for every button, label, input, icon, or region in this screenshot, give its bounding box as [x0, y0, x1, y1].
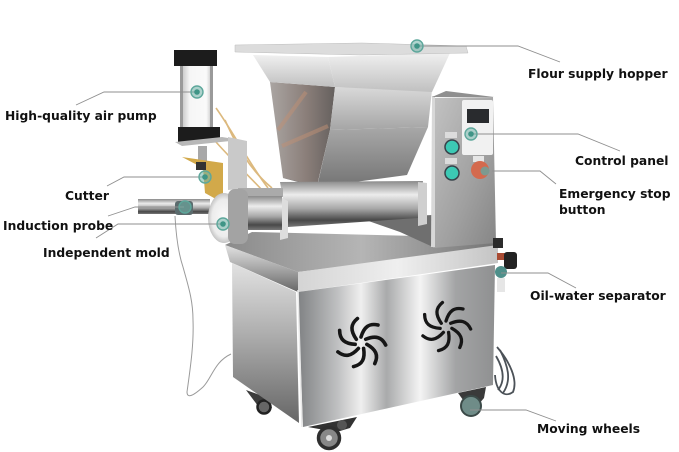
screw barrel — [280, 181, 427, 240]
control box — [360, 91, 496, 248]
callout markers — [179, 40, 477, 230]
label: high-quality air pump: High-quality air pump — [5, 109, 157, 123]
rim left — [225, 245, 298, 292]
label: cutter: Cutter — [65, 189, 110, 203]
induction probe rod — [138, 199, 210, 215]
label: emergency stop button: button — [559, 203, 606, 217]
reflection — [278, 92, 328, 146]
air pump hoses — [216, 108, 272, 190]
coiled air hose — [495, 347, 515, 394]
power cable — [175, 216, 231, 396]
right caster — [458, 387, 486, 416]
leader lines — [76, 46, 620, 421]
mold head — [208, 188, 283, 244]
control display module — [462, 100, 493, 155]
label: flour supply hopper: Flour supply hopper — [528, 67, 669, 81]
hopper — [235, 43, 468, 187]
left side panel — [232, 263, 299, 423]
label: independent mold: Independent mold — [43, 246, 170, 260]
oil-water separator — [493, 238, 517, 292]
label: emergency stop button: Emergency stop — [559, 187, 671, 201]
pump cylinder — [180, 66, 213, 128]
front caster — [308, 417, 357, 448]
label: oil-water separator: Oil-water separator — [530, 289, 667, 303]
fan vent left — [338, 318, 386, 367]
green buttons — [445, 132, 459, 180]
emergency stop button — [471, 156, 490, 179]
front edge highlight — [298, 290, 302, 427]
hopper lower band — [317, 127, 428, 187]
hopper middle band — [330, 87, 432, 130]
label: induction probe: Induction probe — [3, 219, 113, 233]
cutter blade — [182, 157, 223, 203]
hopper lower left — [270, 82, 335, 186]
pump bottom cap — [178, 127, 220, 142]
label: control panel: Control panel — [575, 154, 669, 168]
label: moving wheels: Moving wheels — [537, 422, 640, 436]
hopper top plate — [235, 43, 468, 55]
rear caster — [246, 390, 272, 414]
fan vent right — [423, 302, 471, 351]
machine base cabinet — [225, 232, 498, 448]
hopper upper right — [328, 53, 450, 92]
front panel — [298, 265, 495, 427]
pump top cap — [174, 50, 217, 66]
tray top — [225, 232, 498, 272]
hopper upper left — [253, 55, 335, 87]
cylinder air pump — [174, 50, 247, 190]
rim right — [298, 245, 498, 292]
bracket — [175, 137, 240, 146]
